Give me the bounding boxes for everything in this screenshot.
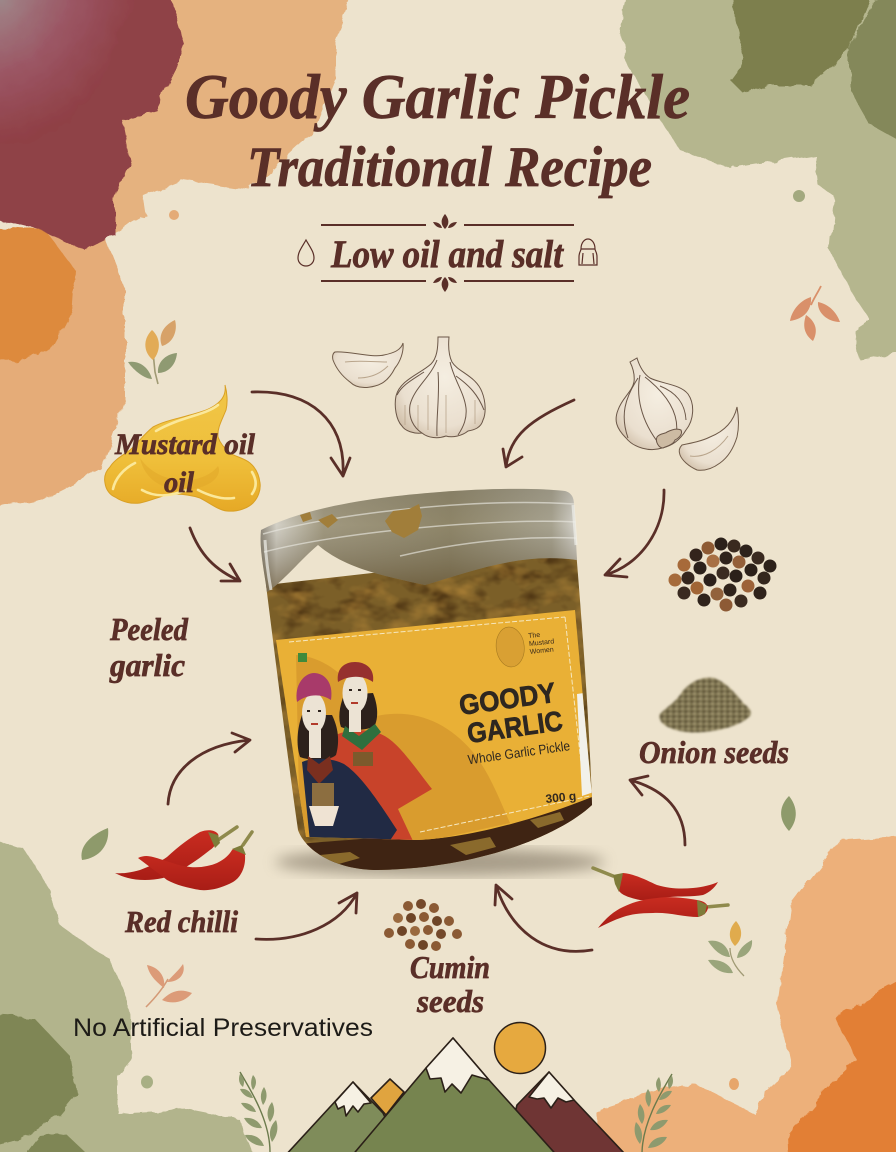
product name: GARLIC [465,705,565,749]
mustard oil splash [105,385,260,511]
subtitle: low oil and salt [298,214,597,292]
herb left [239,1072,277,1152]
icon: garlic bulb right [616,358,693,450]
icon: garlic bulb centre [395,337,485,438]
arrow 7 [495,885,592,951]
title: Goody Garlic Pickle [185,62,690,132]
main mountain [340,1038,570,1152]
arrow 3 [605,490,664,577]
arrow 1 [252,392,350,476]
icon: leaf left [81,828,108,860]
small dots [141,1076,739,1090]
side nutrition label [577,693,592,796]
icon: leaf sprig top left [128,320,177,384]
label: peeled garlic: Peeled [109,611,189,647]
red chilli left [115,827,252,890]
label: peeled garlic: garlic [109,647,185,683]
pickle smears [300,504,422,538]
subtitle: low oil and salt: Low oil and salt [330,233,564,276]
label: peeled garlic [109,611,189,683]
watercolor: top left [0,0,358,512]
net weight: 300 g [545,789,577,806]
brand logo: The [528,632,541,640]
brand logo: Women [530,646,554,656]
orange diamond peak [371,1079,404,1115]
label: red chilli: Red chilli [124,904,238,939]
label: no artificial preservatives: No Artificial Preservatives [73,1014,373,1042]
left mountain [272,1082,410,1152]
product name [460,682,570,764]
label: mustard oil: Mustard oil [114,428,256,461]
icon: sprig lower left [146,964,192,1007]
label: mustard oil: oil [164,466,195,499]
garlic group [333,337,738,470]
arrow 2 [503,400,574,467]
icon: leaf sprig top right [790,286,840,341]
icon: leaf right [781,796,796,831]
jar [260,489,600,880]
product name: GOODY [457,677,558,721]
sun [494,1022,546,1074]
woman left [296,673,397,842]
label: cumin seeds: Cumin [410,949,490,985]
icon: small green dot [793,190,805,202]
arrow 6 [256,893,357,939]
small orange splash dot [169,210,179,220]
cumin seeds pile [384,899,462,951]
icon: garlic clove right [679,407,738,470]
left and right glass highlights [265,505,576,590]
peppercorns [668,538,776,612]
onion seeds pile [659,678,751,732]
title: Traditional Recipe [247,136,652,199]
label: cumin seeds [410,949,490,1019]
brand logo [496,626,554,668]
watercolor: top right [620,0,896,360]
jar shadow [275,848,605,876]
label stitching [289,617,590,832]
lid tone overlay [261,489,577,592]
arrow 4 [190,528,240,581]
product name: Whole Garlic Pickle [467,738,571,767]
jar contents [266,558,592,870]
brand logo: Mustard [529,638,555,648]
arrow 5 [168,733,250,804]
red chilli right [593,868,728,928]
watercolor: bottom left [0,835,260,1152]
herb right [635,1074,673,1152]
icon: salt shaker [579,239,597,265]
green veg mark [298,653,307,662]
label [270,605,600,845]
icon: sprig lower right [708,921,752,976]
lid highlights [263,503,576,556]
woman right [330,662,432,840]
jar lid [261,489,577,592]
label: mustard oil [114,428,256,499]
icon: garlic clove left [333,343,403,388]
label: onion seeds: Onion seeds [639,734,789,770]
arrow 8 [630,776,685,845]
arrows [168,392,685,951]
right mountain [500,1072,640,1152]
mountains [272,1038,640,1152]
icon: oil drop [298,240,314,266]
watercolor: bottom right [594,835,896,1152]
label: cumin seeds: seeds [416,983,484,1019]
title [185,62,690,199]
